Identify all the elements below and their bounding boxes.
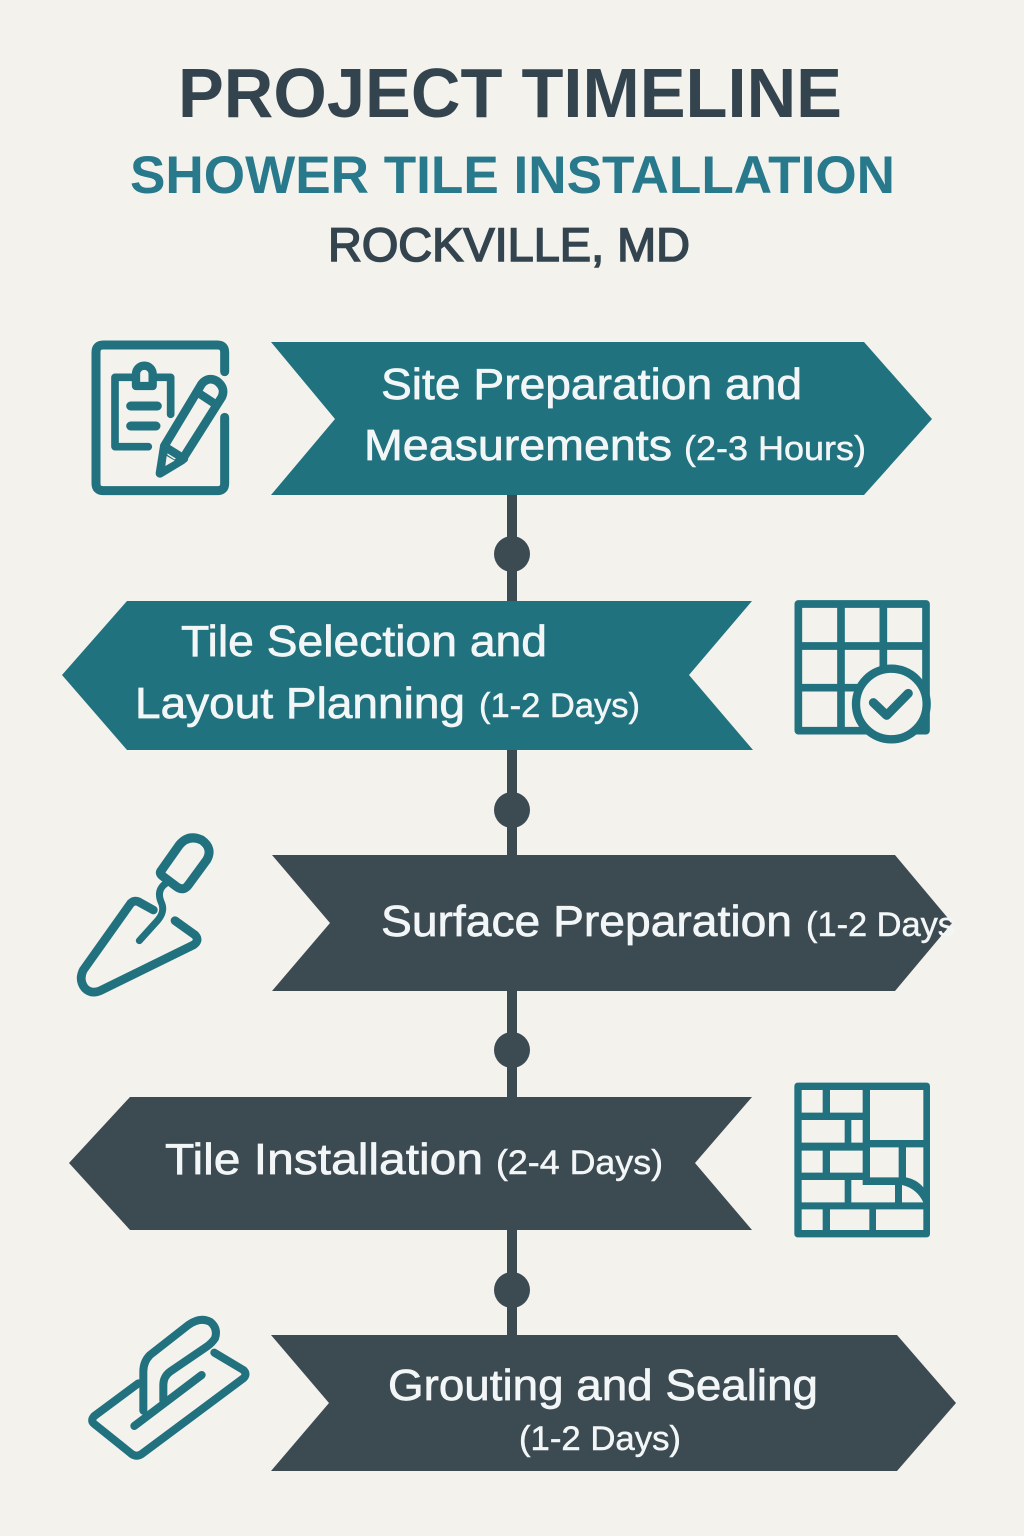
step 1: site preparation banner (271, 342, 932, 495)
step 2: tile selection banner: (1-2 Days) (479, 687, 640, 725)
step 1: site preparation banner: Site Preparation and (381, 360, 802, 409)
step 5: grouting and sealing banner: Grouting and Sealing (388, 1361, 818, 1410)
step 1: site preparation banner: Measurements (364, 421, 672, 470)
step 4: tile installation banner (69, 1097, 752, 1230)
step 3: surface preparation banner: Surface Preparation (381, 897, 792, 946)
icon: tile grid with check mark (798, 604, 927, 739)
step 5: grouting and sealing banner (271, 1335, 956, 1471)
step 2: tile selection banner: Tile Selection and (181, 617, 547, 666)
step 4: tile installation banner: Tile Installation (165, 1135, 483, 1184)
timeline connector (494, 494, 530, 1336)
icon: pointing trowel (81, 838, 209, 992)
step 5: grouting and sealing banner: (1-2 Days) (519, 1420, 681, 1458)
subtitle: SHOWER TILE INSTALLATION (130, 146, 895, 205)
step 2: tile selection banner: Layout Planning (135, 679, 465, 728)
step 2: tile selection banner (62, 601, 753, 750)
location: ROCKVILLE, MD (328, 218, 690, 271)
icon: grout float (92, 1320, 245, 1456)
step 4: tile installation banner: (2-4 Days) (496, 1144, 663, 1182)
icon: tile pattern wall (794, 1083, 930, 1237)
title: PROJECT TIMELINE (178, 54, 842, 132)
step 3: surface preparation banner (272, 855, 955, 991)
step 1: site preparation banner: (2-3 Hours) (684, 430, 866, 468)
step 3: surface preparation banner: (1-2 Days (806, 906, 955, 944)
icon: clipboard and pencil (96, 345, 225, 491)
